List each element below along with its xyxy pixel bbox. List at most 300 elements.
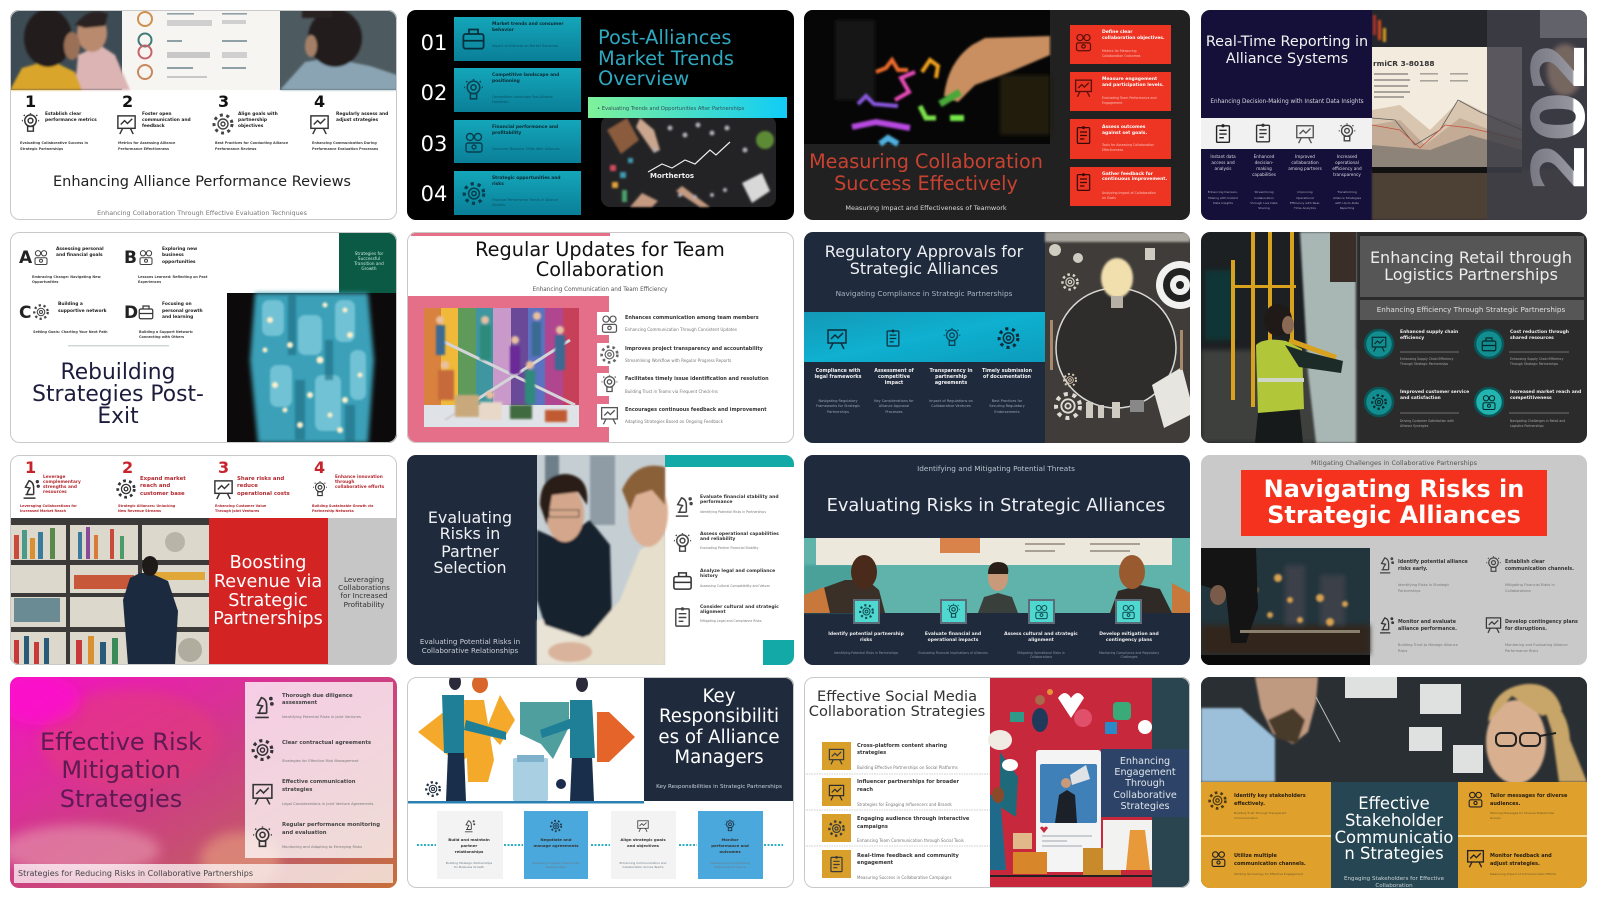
- list: numbered teal blocks: 02: [421, 81, 447, 105]
- illustration: social media phone collage: [988, 677, 1190, 888]
- list: red objective cards: [1070, 25, 1171, 206]
- list: numbered revenue levers: operational costs: [237, 491, 290, 497]
- heading box: Enhancing Retail through: [1370, 248, 1572, 267]
- list: responsibility cards: Building Strategic Partnerships: [446, 861, 493, 865]
- list: logistics benefits: [1365, 329, 1581, 428]
- list: benefit columns: Making with Instant: [1208, 196, 1239, 200]
- list: mitigation strategies: Thorough due diligence: [282, 693, 353, 699]
- list: right stakeholder tactics: [1458, 782, 1587, 888]
- list: logistics benefits: Navigating Challenges in Retail and: [1510, 419, 1565, 423]
- list: mitigation strategies: Effective communication: [282, 779, 356, 785]
- panel: Real-Time Reporting in Alliance Systems: [1201, 10, 1600, 220]
- list: benefit columns: transparency: [1333, 172, 1361, 177]
- list: update benefits: Adapting Strategies Based on Ongoing Feedback: [625, 419, 724, 424]
- photo: laptop dashboard: [1372, 10, 1600, 220]
- list: left stakeholder tactics: Identify key stakeholders: [1234, 793, 1306, 799]
- list: numbered teal blocks: Consumer Behavior Shifts After Alliances: [492, 147, 560, 151]
- list: risk actions: for disruptions.: [1505, 626, 1547, 632]
- list: mitigation strategies: Clear contractual agreements: [282, 740, 371, 746]
- list: compliance columns: Frameworks for Strategic: [816, 404, 860, 408]
- list: red objective cards: Gather feedback for: [1102, 171, 1154, 177]
- panel: Evaluating Risks in Partner Selection: [407, 455, 794, 665]
- panel: Effective Stakeholder Communication Strategies: [1201, 677, 1587, 889]
- list: risk actions: Identifying Risks in Strategic: [1398, 583, 1449, 587]
- heading box: [1360, 236, 1584, 297]
- list: risk actions: Establish clear: [1505, 559, 1545, 565]
- list: collaboration tactics: [804, 742, 990, 880]
- photo: team with colourful stripes: [424, 308, 579, 427]
- list: benefit columns: Efficiency with Real-: [1290, 201, 1320, 205]
- title panel: Boosting: [230, 553, 306, 573]
- list: four numbered review steps: 4: [314, 92, 325, 111]
- list: four numbered review steps: Performance Effectiveness: [118, 147, 169, 151]
- list: numbered teal blocks: [421, 17, 581, 215]
- list: lettered strategies: B: [124, 248, 137, 268]
- list: collaboration tactics: Strategies for Engaging Influencers and Brands: [857, 802, 952, 807]
- title: Collaboration Strategies: [809, 703, 985, 720]
- list: compliance columns: agreements: [935, 380, 967, 386]
- title: [811, 153, 1042, 194]
- list: responsibility cards: Monitor: [721, 837, 739, 842]
- list: risk actions: Monitor and evaluate: [1398, 619, 1457, 625]
- list: numbered teal blocks: Strategic opportunities and: [492, 175, 561, 181]
- list: red objective cards: Collaboration Outcomes: [1102, 54, 1141, 58]
- list: left stakeholder tactics: communication channels.: [1234, 861, 1306, 867]
- list: risk checks: Assess operational capabilities: [700, 531, 779, 537]
- list: responsibility cards: outcomes: [719, 849, 741, 854]
- list: responsibility cards: for Business Growth: [454, 865, 484, 869]
- list: numbered revenue levers: Leverage: [43, 474, 65, 480]
- list: responsibility cards: Build and maintain: [448, 837, 490, 842]
- list: benefit columns: Enhancing Decision-: [1208, 190, 1238, 194]
- list: numbered revenue levers: Leveraging Collaborations for: [20, 504, 77, 508]
- list: benefit columns: with Up-to-Date: [1335, 201, 1359, 205]
- title panel: Selection: [433, 558, 507, 577]
- title: [826, 245, 1024, 278]
- subtitle box: Enhancing Efficiency Through Strategic Partnerships: [1377, 305, 1565, 314]
- list: risk checks: Assessing Cultural Compatibility and Values: [700, 584, 770, 588]
- list: risk steps with teal icon tiles: Collaborations: [1030, 655, 1053, 659]
- list: numbered revenue levers: strengths and: [43, 484, 77, 490]
- list: numbered teal blocks: Impact of Alliances on Market Dynamics: [492, 44, 558, 48]
- list: collaboration tactics: engagement: [857, 860, 894, 866]
- list: numbered revenue levers: Strategic Alliances: Unlocking: [118, 504, 176, 508]
- list: collaboration tactics: strategies: [857, 750, 886, 756]
- title: Effective: [1358, 794, 1430, 813]
- list: logistics benefits: Through Strategic Partnerships: [1509, 362, 1558, 366]
- list: compliance columns: impact: [885, 380, 904, 386]
- list: numbered revenue levers: Increased Market Reach: [20, 509, 67, 513]
- title: Collaboration: [536, 258, 664, 281]
- list: responsibility cards: Alliance Performance: [714, 865, 746, 869]
- list: compliance columns: partnership: [935, 374, 967, 380]
- list: right stakeholder tactics: Monitor feedback and: [1490, 853, 1552, 859]
- list: update benefits: Building Trust in Teams via Frequent Check-Ins: [625, 389, 718, 394]
- list: lettered strategies: Experiences: [138, 280, 161, 284]
- list: lettered strategies: Connecting with Others: [139, 335, 184, 339]
- list: lettered strategies: Opportunities: [32, 280, 58, 284]
- list: risk actions: Partnerships: [1398, 589, 1420, 593]
- list: red objective cards: Evaluating Team Performance and: [1102, 96, 1157, 100]
- list: four numbered review steps: Performance Reviews: [215, 147, 256, 151]
- list: red objective cards: Effectiveness: [1102, 148, 1124, 152]
- subtitle: Navigating Compliance in Strategic Partnerships: [836, 289, 1013, 298]
- panel: Enhancing Alliance Performance Reviews: [10, 9, 397, 220]
- title: Communicatio: [1335, 828, 1453, 847]
- list: four numbered review steps: Regularly assess and: [336, 111, 388, 117]
- list: collaboration tactics: Cross-platform content sharing: [857, 743, 947, 749]
- list: four numbered review steps: Strategic Partnerships: [20, 147, 63, 151]
- subtitle: Mitigating Challenges in Collaborative Partnerships: [1311, 459, 1478, 467]
- list: red objective cards: Define clear: [1102, 29, 1133, 35]
- callout bar: • Evaluating Trends and Opportunities After Partnerships: [597, 106, 745, 112]
- list: benefit columns: among partners: [1288, 166, 1322, 171]
- photo: analyst in front of chart wall: [10, 518, 209, 665]
- list: numbered revenue levers: through: [335, 479, 354, 485]
- list: mitigation strategies: [245, 682, 393, 858]
- photo: warehouse worker: [1201, 232, 1356, 443]
- list: risk steps with teal icon tiles: [828, 600, 1159, 659]
- list: right stakeholder tactics: Tailor messages for diverse: [1490, 793, 1568, 799]
- title panel: [407, 455, 537, 665]
- list: four numbered review steps: 2: [122, 92, 133, 111]
- list: benefit columns: Improving: [1297, 190, 1313, 194]
- list: logistics benefits: Alliance Synergies: [1400, 424, 1429, 428]
- subtitle bar: Strategies for Reducing Risks in Collaborative Partnerships: [18, 869, 253, 878]
- title banner: [1241, 470, 1547, 536]
- photo: colleagues at chalkboard: [1201, 677, 1587, 784]
- list: mitigation strategies: strategies: [282, 787, 312, 793]
- title: Measuring Collaboration: [809, 150, 1043, 173]
- list: risk steps with teal icon tiles: Develop mitigation and: [1099, 631, 1159, 637]
- list: lettered strategies: Focusing on: [162, 301, 192, 307]
- list: numbered revenue levers: 3: [218, 458, 229, 477]
- panel: Regulatory Approvals for Strategic Alliances: [804, 232, 1204, 443]
- list: responsibility cards: and objectives: [627, 843, 660, 848]
- title: n Strategies: [1344, 844, 1444, 863]
- list: numbered revenue levers: resources: [43, 489, 67, 495]
- title: Regulatory Approvals for: [825, 242, 1024, 261]
- photo: blurred skyline with figure: [1201, 548, 1370, 665]
- title panel: Revenue via: [214, 572, 322, 592]
- list: risk checks: Analyze legal and compliance: [700, 568, 775, 574]
- list: benefit columns: Time Analytics: [1293, 206, 1316, 210]
- list: benefit columns: Streamlining: [1254, 190, 1274, 194]
- list: lettered strategies: and learning: [162, 314, 193, 320]
- list: risk steps with teal icon tiles: Evaluate financial and: [925, 631, 981, 637]
- subtitle: Collaboration: [1375, 883, 1413, 889]
- list: risk actions: Building Trust to Manage Alliance: [1398, 643, 1459, 647]
- list: risk steps with teal icon tiles: Assess cultural and strategic: [1004, 631, 1078, 637]
- list: benefit columns: operational: [1335, 160, 1359, 165]
- list: numbered revenue levers: Share risks and: [237, 476, 284, 482]
- title: [809, 688, 985, 720]
- list: lettered strategies: Exploring new: [162, 246, 197, 252]
- list: update benefits: Enhancing Communication Through Consistent Updates: [625, 327, 737, 332]
- list: collaboration tactics: reach: [857, 787, 873, 793]
- list: four numbered review steps: Best Practices for Conducting Alliance: [215, 141, 289, 145]
- list: four numbered review steps: objectives: [238, 123, 264, 129]
- list: risk actions: [1380, 556, 1578, 653]
- title: Effective Social Media: [817, 688, 977, 705]
- list: risk steps with teal icon tiles: alignment: [1028, 637, 1055, 643]
- panel: Enhancing Retail through Logistics Partnerships: [1201, 232, 1587, 443]
- list: lettered strategies: and financial goals: [56, 252, 103, 258]
- list: red objective cards: Analyzing Impact of Collaboration: [1102, 191, 1156, 195]
- list: compliance columns: Compliance with: [816, 368, 861, 374]
- list: benefit columns: efficiency and: [1332, 166, 1362, 171]
- list: right stakeholder tactics: audiences.: [1490, 801, 1521, 807]
- list: risk steps with teal icon tiles: Mitigating Operational Risks in: [1017, 651, 1065, 655]
- list: lettered strategies: C: [19, 303, 31, 323]
- list: benefit columns: Operational: [1296, 196, 1314, 200]
- list: compliance columns: Alliance Approval: [879, 404, 909, 408]
- list: red objective cards: Metrics for Measuring: [1102, 49, 1137, 53]
- list: risk checks: alignment: [700, 609, 726, 615]
- list: risk checks: Consider cultural and strategic: [700, 604, 779, 610]
- list: compliance columns: Navigating Regulatory: [818, 399, 858, 403]
- list: numbered revenue levers: Expand market: [140, 476, 186, 482]
- list: numbered revenue levers: Building Sustainable Growth via: [312, 504, 374, 508]
- list: logistics benefits: Enhancing Supply Chain Efficiency: [1400, 357, 1454, 361]
- list: lettered strategies: A: [19, 248, 33, 268]
- title: Enhancing Alliance Performance Reviews: [53, 174, 351, 190]
- list: mitigation strategies: Monitoring and Adapting to Emerging Risks: [282, 845, 362, 849]
- panel: Regular Updates for Team Collaboration: [407, 232, 794, 443]
- list: logistics benefits: Increased market reach and: [1510, 389, 1581, 395]
- list: benefit columns: Enhanced: [1254, 154, 1275, 159]
- subtitle box: Enhancing: [1120, 756, 1170, 767]
- list: compliance columns: Transparency in: [929, 368, 973, 374]
- list: four numbered review steps: Metrics for Assessing Alliance: [118, 141, 176, 145]
- list: mitigation strategies: Regular performance monitoring: [282, 822, 380, 828]
- list: risk steps with teal icon tiles: Identify potential partnership: [828, 631, 905, 637]
- title panel: Evaluating: [428, 508, 512, 527]
- list: responsibility cards: manage agreements: [533, 843, 579, 848]
- list: four numbered review steps: communication and: [142, 117, 191, 123]
- list: benefit columns: Reporting: [1340, 206, 1354, 210]
- title: Exit: [97, 404, 139, 429]
- title panel: Collaborative Relationships: [422, 646, 519, 655]
- subtitle box: [1101, 749, 1190, 817]
- callout: green tagline: Growth: [361, 266, 377, 271]
- subtitle box: Strategies: [1120, 801, 1170, 812]
- list: risk checks: history: [700, 573, 718, 579]
- list: lettered strategies: D: [124, 303, 138, 323]
- title: Post-Alliances: [598, 26, 731, 49]
- list: responsibility cards: Collaboration Across Teams: [622, 865, 664, 869]
- list: compliance columns: Timely submission: [982, 368, 1033, 374]
- subtitle panel: Leveraging: [344, 575, 384, 584]
- list: risk actions: Risks: [1398, 649, 1407, 653]
- list: benefit columns: capabilities: [1252, 172, 1276, 177]
- subtitle panel: for Increased: [340, 591, 388, 600]
- list: left stakeholder tactics: effectively.: [1234, 801, 1265, 807]
- title: [1206, 34, 1368, 67]
- list: risk steps with teal icon tiles: operational impacts: [928, 637, 979, 643]
- list: logistics benefits: Enhanced supply chain: [1400, 329, 1458, 335]
- list: benefit columns: decision-: [1255, 160, 1274, 165]
- list: risk steps with teal icon tiles: Identifying Potential Risks in Partnerships: [834, 651, 898, 655]
- list: numbered revenue levers: Enhancing Customer Value: [215, 504, 267, 508]
- panel: Effective Social Media Collaboration Strategies: [804, 677, 1190, 888]
- list: lettered strategies: supportive network: [58, 308, 107, 314]
- list: risk actions: Collaborations: [1505, 589, 1531, 593]
- list: risk actions: Mitigating Financial Risks in: [1505, 583, 1555, 587]
- list: red objective cards: Engagement: [1102, 101, 1123, 105]
- list: red objective cards: collaboration objectives.: [1102, 35, 1165, 41]
- title panel: Risks in: [440, 524, 500, 543]
- list: right stakeholder tactics: Groups: [1490, 816, 1501, 820]
- list: four numbered review steps: 3: [218, 92, 229, 111]
- callout: green tagline: Successful: [358, 256, 380, 261]
- list: compliance columns: Partnerships: [827, 410, 849, 414]
- title panel: Evaluating Potential Risks in: [420, 637, 520, 646]
- list: compliance columns: Endorsements: [994, 410, 1020, 414]
- list: compliance columns: competitive: [878, 374, 911, 380]
- title: [599, 29, 733, 86]
- subtitle bar: [14, 864, 393, 883]
- list: compliance columns: Assessment of: [874, 368, 915, 374]
- panel: Measuring Collaboration Success Effectively: [804, 10, 1190, 220]
- list: numbered teal blocks: 01: [421, 31, 447, 55]
- list: compliance columns: legal frameworks: [815, 374, 862, 380]
- list: numbered revenue levers: New Revenue Streams: [118, 509, 161, 513]
- list: logistics benefits: Logistics Partnerships: [1510, 424, 1544, 428]
- photo: strategy table with charts: Morthertos: [650, 172, 694, 180]
- list: risk actions: Develop contingency plans: [1505, 619, 1578, 625]
- title panel: [209, 518, 328, 665]
- list: compliance columns: [815, 368, 1033, 414]
- subtitle: Enhancing Decision-Making with Instant Data Insights: [1210, 99, 1364, 105]
- title: Evaluating Risks in Strategic Alliances: [827, 495, 1165, 516]
- list: numbered teal blocks: Financial performance and: [492, 124, 558, 130]
- title panel: Partnerships: [213, 609, 323, 629]
- list: responsibility cards: Relationships: [546, 865, 566, 869]
- list: update benefits: Facilitates timely issue identification and resolution: [625, 376, 769, 382]
- list: risk checks: [674, 494, 779, 626]
- icon band: [804, 312, 1045, 362]
- list: risk checks: Identifying Potential Risks in Partnerships: [700, 510, 766, 514]
- list: numbered teal blocks: Formation: [492, 100, 509, 104]
- list: numbered revenue levers: reach and: [140, 483, 170, 489]
- subtitle box: Engagement: [1114, 767, 1176, 778]
- list: responsibility cards: Align strategic goals: [620, 837, 666, 842]
- title: Rebuilding: [61, 360, 175, 385]
- photo: laptop dashboard: rmiCR 3-80188: [1373, 59, 1434, 68]
- list: red objective cards: on Goals: [1102, 196, 1116, 200]
- list: mitigation strategies: assessment: [282, 700, 318, 706]
- list: logistics benefits: competitiveness: [1510, 395, 1552, 401]
- list: red objective cards: continuous improvement.: [1102, 176, 1167, 182]
- list: compliance columns: Impact of Regulations on: [929, 399, 973, 403]
- title: Success Effectively: [834, 172, 1018, 195]
- title: Strategies: [60, 785, 182, 813]
- list: risk checks: Evaluate financial stability and: [700, 494, 779, 500]
- list: left stakeholder tactics: [1201, 782, 1331, 888]
- list: four numbered review steps: Establish clear: [45, 111, 82, 117]
- title panel: Strategic: [228, 591, 308, 611]
- list: risk actions: Monitoring and Evaluating Alliance: [1505, 643, 1568, 647]
- title panel: Partner: [441, 542, 499, 561]
- list: benefit columns: making: [1256, 166, 1272, 171]
- list: four numbered review steps: Align goals with: [238, 111, 278, 117]
- subtitle panel: Profitability: [344, 600, 385, 609]
- subtitle: Measuring Impact and Effectiveness of Teamwork: [845, 204, 1007, 212]
- list: numbered revenue levers: reduce: [237, 483, 258, 489]
- list: numbered revenue levers: 4: [314, 458, 325, 477]
- list: logistics benefits: Improved customer service: [1400, 389, 1469, 395]
- list: four numbered review steps: feedback: [142, 123, 165, 129]
- list: risk actions: Identify potential alliance: [1398, 559, 1469, 565]
- list: numbered revenue levers: Partnership Networks: [312, 509, 354, 513]
- list: numbered revenue levers: customer base: [140, 491, 185, 497]
- panel: Evaluating Risks in Strategic Alliances: [804, 455, 1190, 665]
- subtitle box: Through: [1124, 778, 1165, 789]
- list: lettered strategies: business: [162, 252, 184, 258]
- list: numbered revenue levers: collaborative efforts: [335, 484, 385, 490]
- list: responsibility cards: Measuring and Optimizing: [710, 861, 750, 865]
- title: Overview: [598, 67, 689, 90]
- list: benefit columns: analysis: [1215, 166, 1231, 171]
- list: risk steps with teal icon tiles: contingency plans: [1106, 637, 1152, 643]
- list: collaboration tactics: Enhancing Team Communication through Social Tools: [857, 838, 964, 843]
- list: logistics benefits: Driving Customer Satisfaction with: [1400, 419, 1454, 423]
- list: compliance columns: of documentation: [983, 374, 1032, 380]
- title banner: Strategic Alliances: [1267, 501, 1521, 529]
- photo: glowing teal jars: [227, 293, 397, 443]
- list: update benefits: [597, 312, 769, 427]
- title: Strategic Alliances: [850, 259, 998, 278]
- list: benefit columns: through Live Data: [1251, 201, 1278, 205]
- list: lettered strategies: Setting Goals: Charting Your Next Path: [33, 330, 108, 334]
- list: collaboration tactics: Influencer partnerships for broader: [857, 779, 959, 785]
- list: lettered strategies: [19, 246, 208, 339]
- list: update benefits: Enhances communication among team members: [625, 315, 759, 321]
- list: benefit columns: collaboration: [1291, 160, 1319, 165]
- title: [1335, 794, 1453, 863]
- list: benefit columns: [1208, 154, 1362, 210]
- list: logistics benefits: Through Strategic Partnerships: [1399, 362, 1448, 366]
- list: responsibility cards: relationships: [455, 849, 484, 854]
- list: lettered strategies: personal growth: [162, 308, 203, 314]
- list: four numbered review steps: Evaluating Collaborative Success in: [20, 141, 89, 145]
- list: four numbered review steps: Performance Evaluation Processes: [312, 147, 378, 151]
- subtitle: Enhancing Collaboration Through Effective Evaluation Techniques: [97, 209, 308, 217]
- list: mitigation strategies: Strategies for Effective Risk Management: [282, 759, 359, 763]
- illustration: partners exchanging puzzle pieces: [407, 674, 644, 804]
- list: benefit columns: Improved: [1295, 154, 1315, 159]
- list: benefit columns: Sharing: [1258, 206, 1270, 210]
- list: numbered revenue levers: 1: [25, 458, 36, 477]
- list: right stakeholder tactics: Measuring Impact of Communication Efforts: [1490, 872, 1557, 876]
- list: risk checks: Mitigating Legal and Compliance Risks: [700, 619, 762, 623]
- list: risk actions: alliance performance.: [1398, 626, 1457, 632]
- list: numbered teal blocks: positioning: [492, 78, 520, 84]
- list: mitigation strategies: Identifying Potential Risks in Joint Ventures: [282, 715, 361, 719]
- callout: green tagline: Transition and: [353, 261, 384, 266]
- list: numbered revenue levers: 2: [122, 458, 133, 477]
- list: numbered teal blocks: Markets: [492, 203, 505, 207]
- list: left stakeholder tactics: Communication: [1234, 816, 1258, 820]
- subtitle: [1344, 876, 1445, 889]
- list: benefit columns: access and: [1211, 160, 1235, 165]
- list: lettered strategies: Building a Support Network:: [139, 330, 193, 334]
- list: responsibility cards: [417, 811, 783, 879]
- list: responsibility cards: partner: [461, 843, 477, 848]
- list: responsibility cards: performance and: [711, 843, 749, 848]
- heading box: Logistics Partnerships: [1384, 265, 1558, 284]
